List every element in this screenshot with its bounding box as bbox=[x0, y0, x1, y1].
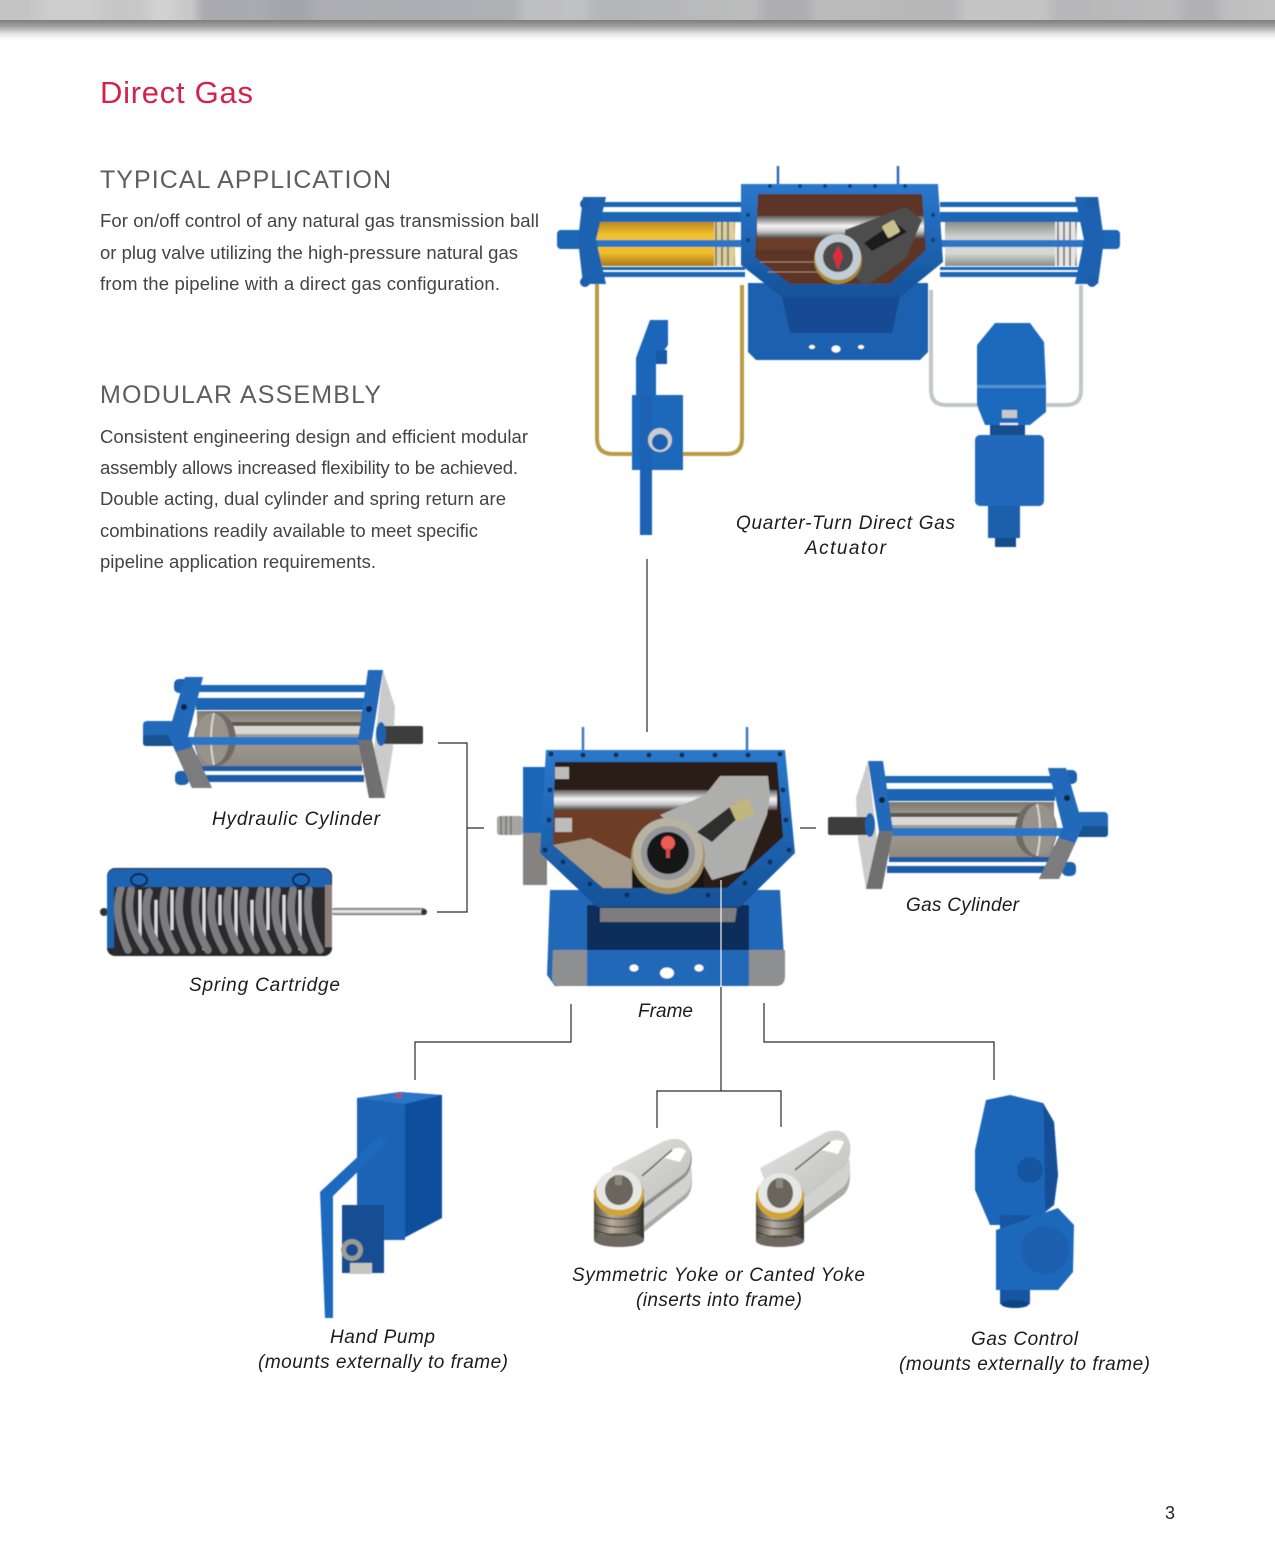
text block: typical application: from the pipeline with a direct gas configuration. bbox=[100, 273, 500, 294]
text block: typical application bbox=[100, 210, 539, 294]
spring cartridge illustration bbox=[100, 868, 427, 956]
connector lines bbox=[415, 559, 994, 1128]
frame illustration bbox=[497, 727, 795, 986]
text block: modular assembly: Consistent engineering design and efficient modular bbox=[100, 426, 528, 447]
text block: modular assembly: Double acting, dual cylinder and spring return are bbox=[100, 488, 506, 509]
caption: actuator: Actuator bbox=[804, 538, 887, 559]
caption: actuator: Quarter-Turn Direct Gas bbox=[736, 513, 956, 534]
hydraulic cylinder illustration bbox=[143, 670, 423, 798]
gas cylinder illustration bbox=[828, 761, 1108, 889]
hand pump illustration bbox=[320, 1092, 442, 1318]
white line over frame bbox=[720, 880, 722, 987]
caption: hand pump bbox=[258, 1327, 508, 1373]
header metal bar bbox=[0, 0, 1275, 40]
caption: yokes: Symmetric Yoke or Canted Yoke bbox=[572, 1265, 865, 1286]
caption: yokes: (inserts into frame) bbox=[636, 1290, 802, 1311]
caption: gas control: (mounts externally to frame) bbox=[899, 1354, 1150, 1375]
caption: gas cylinder: Gas Cylinder bbox=[906, 895, 1020, 916]
caption: gas control bbox=[899, 1329, 1150, 1375]
section: modular assembly bbox=[100, 381, 528, 572]
caption: spring cartridge: Spring Cartridge bbox=[189, 975, 340, 996]
heading: typical application: TYPICAL APPLICATION bbox=[100, 166, 391, 194]
canted yoke illustration bbox=[756, 1130, 850, 1247]
caption: actuator bbox=[736, 513, 956, 559]
caption: frame: Frame bbox=[638, 1001, 693, 1022]
caption: hand pump: Hand Pump bbox=[330, 1327, 435, 1348]
caption: hydraulic cylinder: Hydraulic Cylinder bbox=[212, 809, 381, 830]
symmetric yoke illustration bbox=[594, 1139, 692, 1247]
text block: modular assembly: assembly allows increased flexibility to be achieved. bbox=[100, 457, 518, 478]
gas control illustration bbox=[975, 1095, 1074, 1308]
section: typical application bbox=[100, 166, 539, 294]
heading: modular assembly: MODULAR ASSEMBLY bbox=[100, 381, 381, 409]
text block: modular assembly: pipeline application requirements. bbox=[100, 551, 376, 572]
text block: modular assembly bbox=[100, 426, 528, 572]
caption: yokes bbox=[572, 1265, 865, 1311]
caption: gas control: Gas Control bbox=[971, 1329, 1079, 1350]
text block: typical application: For on/off control of any natural gas transmission ball bbox=[100, 210, 539, 231]
assembled quarter-turn actuator illustration bbox=[557, 166, 1120, 547]
page number: 3 bbox=[1165, 1503, 1175, 1523]
text block: typical application: or plug valve utilizing the high-pressure natural gas bbox=[100, 242, 518, 263]
caption: hand pump: (mounts externally to frame) bbox=[258, 1352, 508, 1373]
text block: modular assembly: combinations readily available to meet specific bbox=[100, 520, 478, 541]
title: Direct Gas bbox=[100, 75, 253, 110]
